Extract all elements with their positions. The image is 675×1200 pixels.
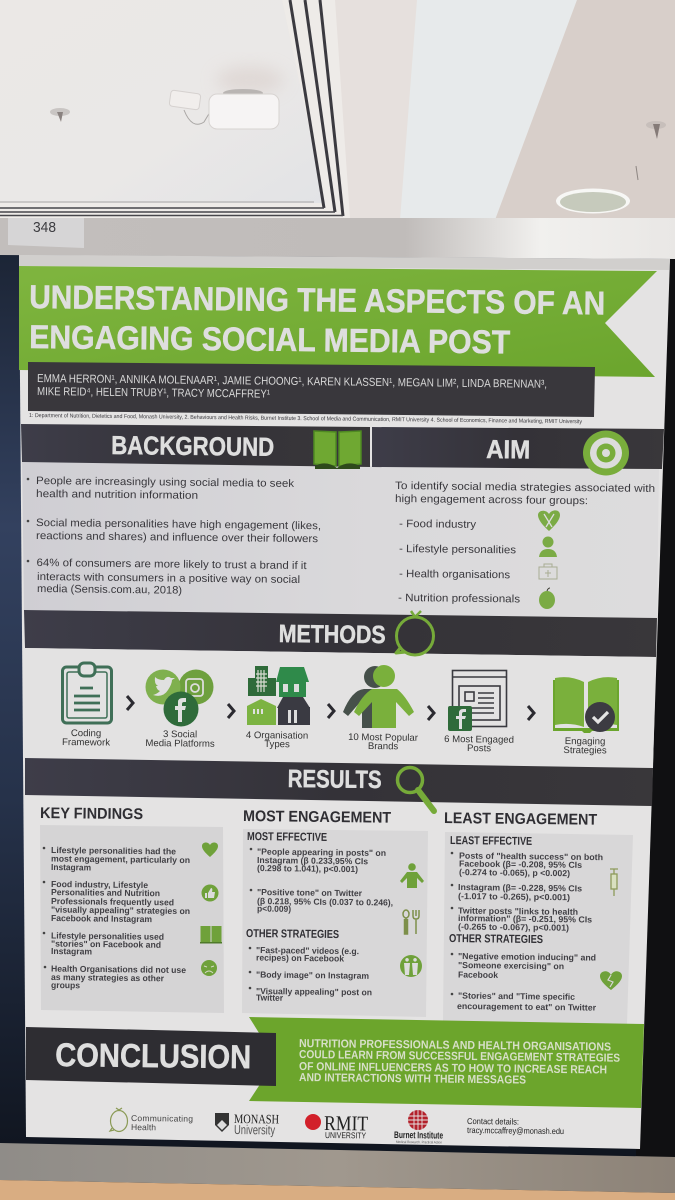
conclusion heading: CONCLUSION (55, 1036, 251, 1075)
icon: ceiling wireless access point (169, 66, 284, 129)
finding 2 line 4: "visually appealing" strategies on (51, 905, 190, 916)
background and aim panel body (22, 462, 659, 618)
icon: target (583, 430, 629, 476)
icon: syringe (610, 869, 618, 896)
least other 1 line 2: "Someone exercising" on (458, 960, 564, 971)
black display board (0, 255, 675, 1158)
finding 3 line 2: "stories" on Facebook and (51, 939, 161, 950)
arrow 3 (328, 704, 334, 718)
icon: back person (343, 666, 386, 728)
aim statement line 1: To identify social media strategies associated with (395, 480, 655, 495)
other strategies heading: OTHER STRATEGIES (246, 928, 339, 941)
label: 3 social: 3 Social (163, 729, 197, 740)
finding 2: Food industry, Lifestyle (51, 879, 148, 890)
other 2: "Body image" on Instagram (256, 970, 369, 981)
group: nutrition professionals: - Nutrition professionals (398, 592, 521, 605)
least engagement panel (443, 810, 633, 1024)
methods heading: METHODS (278, 620, 386, 649)
icon: broken heart (600, 971, 622, 990)
logo: burnet institute (394, 1110, 443, 1145)
affiliations: 1: Department of Nutrition, Dietetics and Food, Monash University, 2. Behaviours and Health Risks, Burnet Institute 3. School of Media and Communication, RMIT University 4. School of Economics, Finance and Marketing, RMIT University (29, 413, 582, 425)
icon: ceiling sprinkler left (50, 108, 70, 122)
other strategies heading: OTHER STRATEGIES (449, 933, 543, 946)
other 1 line 2: recipes) on Facebook (256, 953, 344, 964)
label: 10 most popular: 10 Most Popular (348, 732, 419, 744)
icon: person small (400, 863, 424, 888)
label: 4 organisation: 4 Organisation (246, 730, 308, 742)
step 2: social media platforms (145, 670, 215, 750)
icon: facebook square (448, 706, 472, 731)
bullet 3 line 2: interacts with consumers in a positive way on social (37, 571, 300, 586)
aim text (395, 480, 655, 605)
group: lifestyle personalities: - Lifestyle personalities (399, 543, 517, 556)
least 2 line 2: (-1.017 to -0.265), p<0.001) (458, 891, 570, 902)
finding 4 line 3: groups (51, 980, 80, 990)
authors box (28, 362, 595, 417)
logo: communicating health (110, 1108, 193, 1132)
most effective heading: MOST EFFECTIVE (247, 831, 327, 844)
label: 6 most engaged: 6 Most Engaged (444, 734, 514, 746)
icon: recessed ceiling light (556, 188, 630, 214)
title line 1: UNDERSTANDING THE ASPECTS OF AN (29, 278, 605, 322)
bullet 2: Social media personalities have high engagement (likes, (36, 517, 321, 532)
icon: ceiling sprinkler right (636, 121, 666, 180)
least 3: Twitter posts "links to health (458, 906, 578, 917)
icon: apple speech bubble (396, 611, 434, 655)
finding 2 line 5: Facebook and Instagram (51, 913, 152, 924)
label line 2: Strategies (563, 745, 607, 756)
arrow 4 (428, 706, 434, 720)
finding 3: Lifestyle personalities used (51, 931, 164, 942)
most effective bullets (249, 848, 252, 989)
finding bullets (43, 847, 46, 968)
group: food industry: - Food industry (399, 518, 477, 531)
results heading bar (25, 758, 653, 806)
arrow 2 (228, 704, 234, 718)
finding 4: Health Organisations did not use (51, 964, 186, 975)
effective 1 line 2: Instagram (β 0.233,95% CIs (257, 855, 368, 866)
finding 2 line 2: Personalities and Nutrition (51, 887, 160, 898)
least engagement heading: LEAST ENGAGEMENT (444, 810, 598, 829)
poster number tag (8, 218, 84, 248)
label line 2: Brands (368, 741, 399, 752)
icon: clipboard (62, 663, 112, 723)
least 1 line 3: (-0.274 to -0.065), p <0.002) (459, 867, 570, 878)
effective 1 line 3: (0.298 to 1.041), p<0.001) (257, 863, 358, 874)
title line 2: ENGAGING SOCIAL MEDIA POST (29, 318, 510, 360)
display frame bottom rail (0, 1143, 675, 1193)
least other 1: "Negative emotion inducing" and (458, 951, 596, 963)
bullet 2 line 2: reactions and shares) and influence over their followers (36, 530, 319, 545)
conclusion heading box (26, 1027, 276, 1086)
least effective heading: LEAST EFFECTIVE (450, 835, 532, 848)
icon: light green building (247, 699, 276, 725)
authors line 1: EMMA HERRON¹, ANNIKA MOLENAAR¹, JAMIE CHOONG¹, KAREN KLASSEN¹, MEGAN LIM², LINDA BRENNAN³, (37, 373, 547, 391)
icon: web page (452, 670, 506, 726)
background heading bar (21, 424, 370, 467)
group: health organisations: - Health organisations (399, 568, 511, 581)
conclusion text line 4: AND INTERACTIONS WITH THEIR MESSAGES (299, 1072, 526, 1087)
burnet wordmark: Burnet Institute (394, 1130, 443, 1142)
finding 3 line 3: Instagram (51, 946, 92, 956)
least other 2: "Stories" and "Time specific (458, 991, 575, 1002)
icon: twitter circle (146, 670, 180, 704)
most engagement panel (242, 808, 428, 1017)
contact details (467, 1116, 564, 1136)
least other 1 line 3: Facebook (458, 970, 498, 980)
icon: open book (314, 431, 361, 469)
label: coding framework: Coding (71, 728, 101, 739)
arrow 1 (127, 696, 133, 710)
aim heading bar (372, 427, 664, 469)
conclusion text line 2: COULD LEARN FROM SUCCESSFUL ENGAGEMENT STRATEGIES (299, 1049, 620, 1065)
icon: facebook circle (164, 692, 198, 726)
burnet tagline: Medical Research. Practical Action (396, 1140, 442, 1145)
icon: magnifying glass (398, 768, 434, 811)
effective 2: "Positive tone" on Twitter (257, 887, 363, 898)
least other 2 line 2: encouragement to eat" on Twitter (457, 1001, 597, 1013)
logo: monash university (215, 1111, 279, 1137)
contact email: tracy.mccaffrey@monash.edu (467, 1125, 564, 1136)
other 3 line 2: Twitter (256, 993, 284, 1003)
methods heading bar (24, 610, 657, 657)
icon: small book (200, 926, 222, 944)
icon: instagram circle (178, 670, 214, 704)
results heading: RESULTS (288, 765, 382, 794)
aim heading: AIM (486, 434, 530, 464)
least 3 line 2: information" (β= -0.251, 95% CIs (458, 913, 592, 925)
wooden floor (0, 1180, 675, 1200)
icon: heart (202, 842, 218, 857)
aim statement line 2: high engagement across four groups: (395, 493, 588, 507)
bullet 1: People are increasingly using social media to seek (36, 475, 295, 490)
effective 2 line 3: p<0.009) (257, 904, 291, 914)
icon: check badge (585, 702, 615, 732)
bullet 1 line 2: health and nutrition information (36, 488, 198, 502)
most engagement box (242, 829, 428, 1017)
label: engaging: Engaging (565, 736, 605, 747)
label line 2: Types (264, 739, 290, 750)
ceiling background (0, 0, 675, 220)
label line 2: Posts (467, 743, 491, 754)
logo text: Communicating (131, 1113, 193, 1124)
step 5: most engaged posts (444, 670, 514, 754)
step 6: engaging strategies (553, 677, 619, 756)
finding 1 line 3: Instagram (51, 862, 91, 872)
step 3: organisation types (246, 666, 310, 750)
icon: fork and spoon (403, 910, 419, 934)
label line 2: Media Platforms (145, 738, 215, 750)
rmit wordmark: RMIT (324, 1111, 368, 1136)
rmit university wordmark: UNIVERSITY (325, 1130, 366, 1140)
finding 2 line 3: Professionals frequently used (51, 896, 174, 907)
finding 1 line 2: most engagement, particularly on (51, 854, 190, 865)
bullet 3: 64% of consumers are more likely to trust a brand if it (36, 557, 307, 572)
background heading: BACKGROUND (111, 430, 274, 462)
arrow 5 (528, 706, 534, 720)
least 2: Instagram (β= -0.228, 95% CIs (458, 882, 582, 893)
monash wordmark: MONASH (234, 1111, 279, 1127)
effective 2 line 2: (β 0.218, 95% CIs (0.037 to 0.246), (257, 896, 393, 908)
logo: rmit university (305, 1111, 368, 1140)
icon: couple in circle (400, 955, 422, 977)
display frame top rail (0, 218, 675, 260)
title banner (19, 266, 657, 377)
background bullets (27, 475, 321, 597)
least effective bullets (451, 852, 453, 995)
icon: sad face (201, 960, 217, 976)
effective 1: "People appearing in posts" on (257, 847, 386, 858)
icon: office tower (248, 666, 276, 696)
step 4: popular brands (343, 665, 419, 752)
step 1: coding framework (62, 663, 112, 749)
bullet 3 line 3: media (Sensis.com.au, 2018) (37, 583, 182, 597)
poster sheet (19, 255, 670, 1149)
university wordmark: University (234, 1122, 276, 1137)
other 1: "Fast-paced" videos (e.g. (256, 945, 359, 956)
finding 1: Lifestyle personalities had the (51, 845, 176, 856)
poster number tag: 348 (33, 219, 56, 236)
icon: apple (539, 588, 555, 609)
conclusion banner (249, 1017, 644, 1108)
methods panel (25, 648, 656, 768)
least 3 line 3: (-0.265 to -0.067), p<0.001) (458, 922, 569, 933)
least 1 line 2: Facebook (β= -0.208, 95% CIs (459, 859, 582, 870)
icon: dark house (277, 697, 310, 725)
contact label: Contact details: (467, 1116, 519, 1127)
icon: green house (276, 667, 309, 697)
other 3: "Visually appealing" post on (256, 986, 372, 997)
icon: front person (354, 665, 414, 728)
least 1: Posts of "health success" on both (459, 851, 603, 862)
conclusion text line 3: OF ONLINE INFLUENCERS AS TO HOW TO INCREASE REACH (299, 1061, 607, 1076)
label line 2: Framework (62, 737, 110, 749)
authors line 2: MIKE REID⁴, HELEN TRUBY¹, TRACY MCCAFFREY¹ (37, 386, 270, 401)
key findings heading: KEY FINDINGS (40, 805, 143, 823)
icon: heart with cutlery (538, 510, 560, 531)
logo text line 2: Health (131, 1122, 156, 1132)
icon: thumbs up (202, 884, 218, 902)
finding 4 line 2: as many strategies as other (51, 972, 165, 983)
key findings box (40, 825, 224, 1013)
conclusion text line 1: NUTRITION PROFESSIONALS AND HEALTH ORGANISATIONS (299, 1038, 611, 1054)
key findings panel (40, 805, 224, 1013)
icon: medical kit (539, 564, 557, 579)
icon: open green book (553, 677, 619, 733)
icon: person (539, 536, 557, 557)
most engagement heading: MOST ENGAGEMENT (243, 808, 392, 827)
least engagement box (443, 832, 633, 1024)
